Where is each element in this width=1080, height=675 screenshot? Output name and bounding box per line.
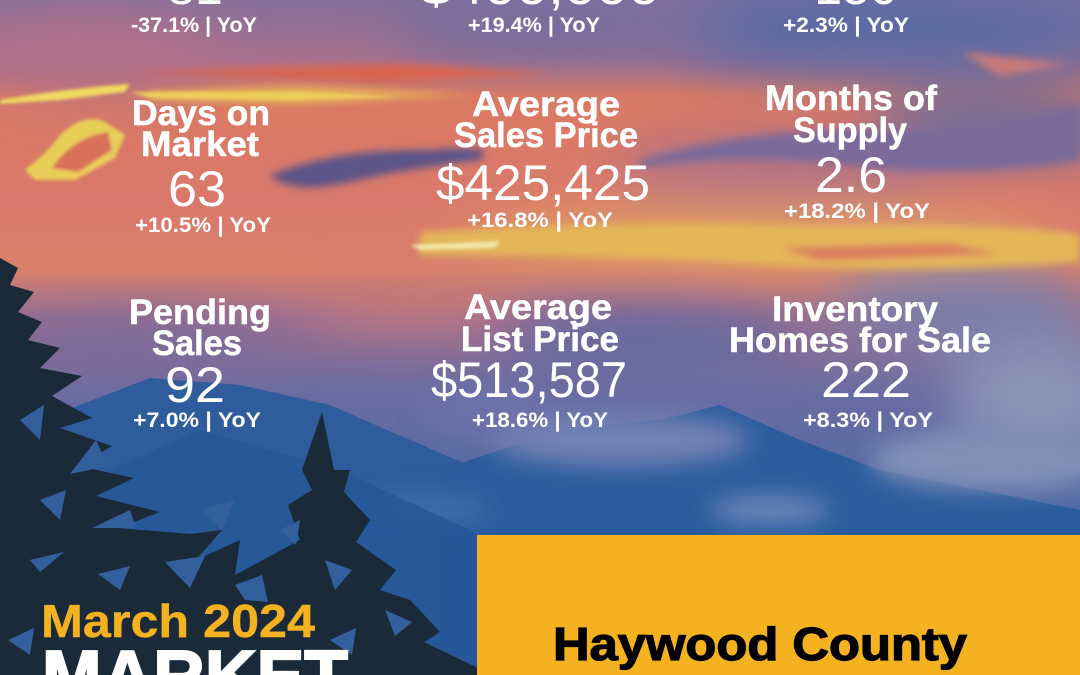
stat: average sales price: $425,425	[436, 155, 650, 211]
stat: average sales price: +16.8% | YoY	[467, 209, 613, 232]
far mountains	[0, 378, 1080, 675]
stat: sold listings (cropped)	[131, 0, 257, 37]
stat: pending sales: Pending	[129, 293, 271, 332]
stat: average sales price: Average	[472, 85, 620, 124]
heading: Haywood County: Haywood County	[553, 618, 967, 670]
stat: average list price: $513,587	[431, 352, 627, 408]
stat: days on market: Market	[141, 125, 259, 164]
stat: inventory homes for sale: 222	[821, 352, 911, 408]
heading: March 2024 Market	[41, 595, 348, 675]
stat: days on market: Days on	[132, 94, 270, 133]
stat: average sales price	[436, 85, 650, 232]
stat: pending sales	[129, 293, 271, 432]
stat: average list price: List Price	[461, 320, 619, 359]
stat: inventory homes for sale: Inventory	[772, 290, 939, 329]
heading: March 2024 Market: March 2024	[41, 595, 315, 647]
stat: new listings (cropped)	[783, 0, 909, 37]
stat: inventory homes for sale	[729, 290, 991, 432]
dark fir trees	[0, 258, 478, 675]
stat: inventory homes for sale: Homes for Sale	[729, 321, 991, 360]
stat: median sales price (cropped): +19.4% | YoY	[468, 14, 600, 37]
stat: pending sales: 92	[165, 357, 225, 413]
stat: months of supply: +18.2% | YoY	[784, 200, 930, 223]
stat: months of supply: Months of	[765, 79, 937, 118]
stat: days on market	[132, 94, 271, 237]
stat: months of supply: Supply	[793, 111, 908, 150]
stat: months of supply: 2.6	[815, 147, 887, 203]
stat: average list price	[431, 288, 627, 432]
stat: inventory homes for sale: +8.3% | YoY	[803, 409, 933, 432]
stat: days on market: 63	[168, 161, 226, 217]
stat: months of supply	[765, 79, 937, 223]
stat: pending sales: +7.0% | YoY	[133, 409, 261, 432]
stat: days on market: +10.5% | YoY	[135, 214, 271, 237]
stat: average list price: Average	[464, 288, 612, 327]
stat: sold listings (cropped): -37.1% | YoY	[131, 14, 257, 37]
stat: average sales price: Sales Price	[454, 116, 638, 155]
stat: new listings (cropped): +2.3% | YoY	[783, 14, 909, 37]
stat: pending sales: Sales	[152, 324, 242, 363]
panel: yellow county box	[477, 535, 1080, 675]
stat: average list price: +18.6% | YoY	[472, 409, 608, 432]
stat: median sales price (cropped)	[420, 0, 660, 37]
